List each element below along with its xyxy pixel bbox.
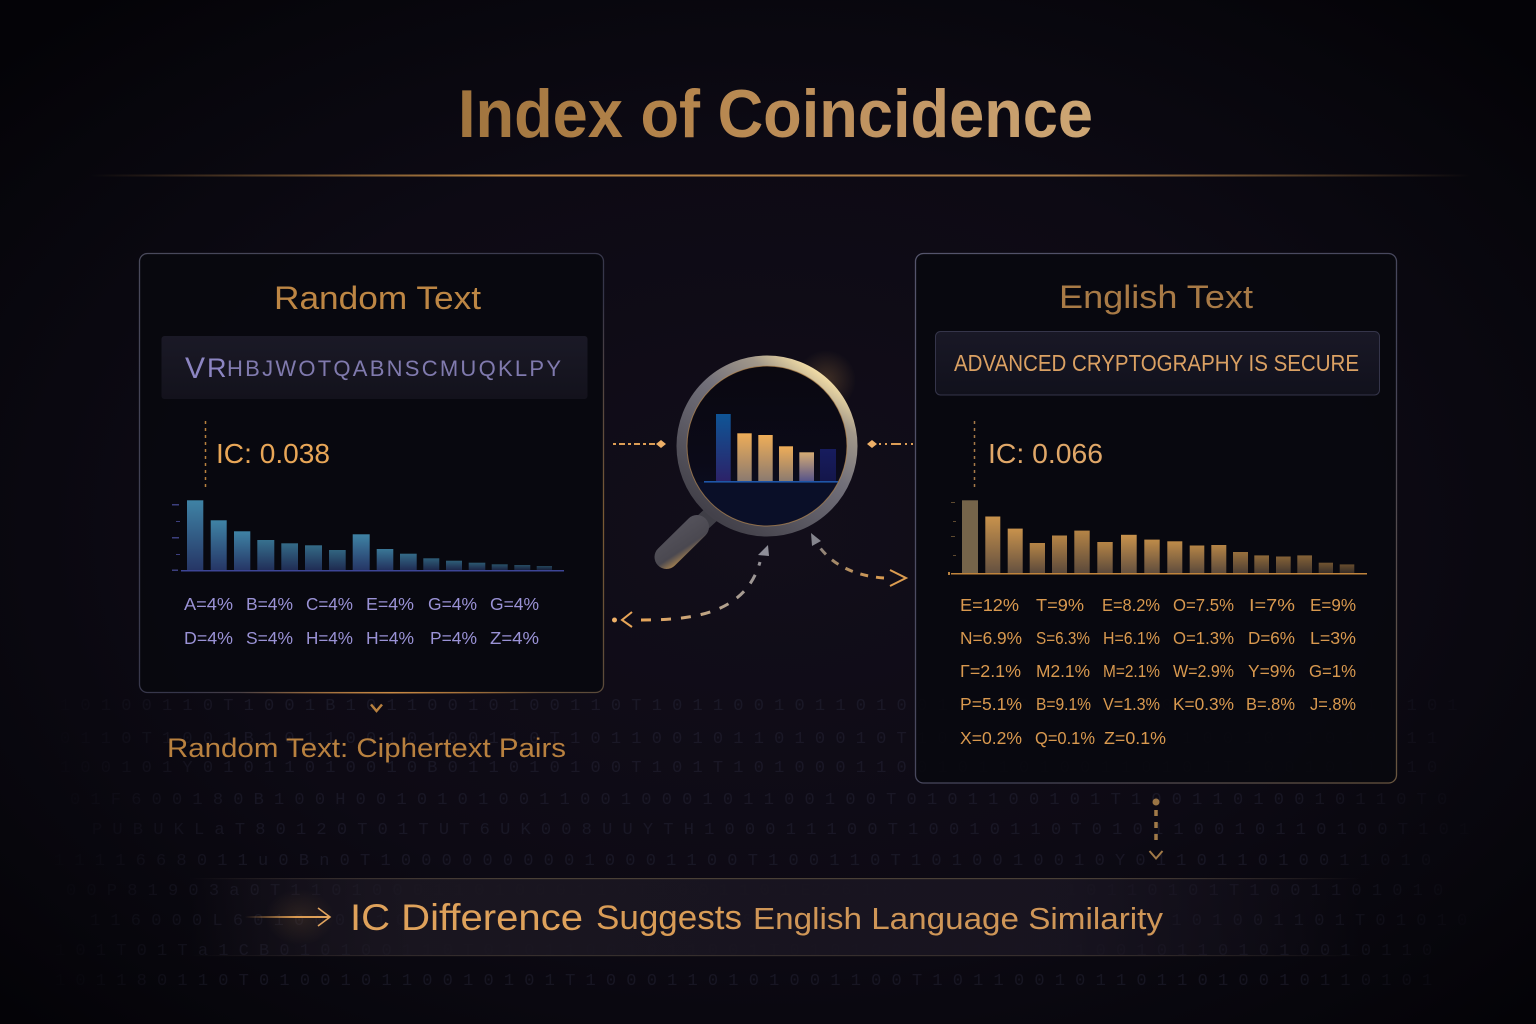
- letter percentages: random: P=4%: [430, 628, 477, 648]
- panel gold bottom edge: [240, 692, 540, 694]
- letter percentages: english: E=12%: [960, 595, 1019, 615]
- caption: random text: Random Text: Ciphertext Pairs: [167, 733, 566, 763]
- conclusion text: [350, 897, 1164, 938]
- plaintext box: [936, 332, 1380, 395]
- letter percentages: english: V=1.3%: [1103, 694, 1160, 714]
- chevron below random panel: [371, 704, 382, 711]
- letter percentages: english: J=.8%: [1310, 694, 1356, 714]
- letter percentages: english: W=2.9%: [1173, 661, 1234, 681]
- panel frame: [916, 254, 1396, 783]
- random ciphertext box: [162, 336, 588, 399]
- letter percentages: english: P=5.1%: [960, 694, 1022, 714]
- letter percentages: english: [960, 595, 1356, 748]
- letter percentages: random: C=4%: [306, 594, 353, 614]
- letter percentages: english: M2.1%: [1036, 661, 1090, 681]
- title: Index of Coincidence: [458, 76, 1093, 152]
- IC value: IC: 0.038: [216, 438, 330, 469]
- background binary pattern: 1 0 0 1 0 1 Y 0 1 0 1 1 0 1 0 0 1 0 B 0 1 1 0 1 0 1 0 0 T 1 0 1 T 1 0 1 0 0 0 1 1 0 0 1 0 1 1 0 1 0 0 1 1 0 1 0 1 T 1 0 0 1 0 1 1 0 1 0: [60, 759, 1437, 778]
- letter percentages: english: K=0.3%: [1173, 694, 1234, 714]
- background binary pattern: 1 1 6 0 0 0 L 6 0 1 0 0 0 1 1 0 1 0 1 0 0 1 0 1 1 0 0 0 1 0 1 1 0 T 0 1 0 1 T 1 0 0 1 0 1 1 0 0 1 0 1 0 1 1 0 1 0 0 1 1 0 1 T 0 1 0 1 0: [90, 912, 1467, 931]
- background binary pattern: 1 0 1 1 8 0 1 1 0 T 0 1 0 0 1 0 1 1 0 0 1 0 1 0 1 T 1 0 0 0 1 1 0 1 0 1 0 0 1 1 0 0 T 1 0 1 1 0 0 1 0 1 1 0 1 1 0 1 0 0 1 0 1 1 0 1 0 1: [55, 972, 1432, 991]
- letter percentages: english: I=7%: [1249, 595, 1295, 615]
- banner arrow: [245, 889, 335, 945]
- letter percentages: random: H=4%: [306, 628, 353, 648]
- letter percentages: english: Z=0.1%: [1104, 728, 1166, 748]
- panel: random text: [140, 254, 604, 694]
- letter percentages: english: B=.8%: [1246, 694, 1295, 714]
- IC value: IC: 0.066: [988, 438, 1103, 469]
- letter percentages: random: A=4%: [184, 594, 233, 614]
- background binary pattern: [54, 697, 1469, 991]
- background binary pattern: 1 0 1 T 0 1 T a 1 C B 0 1 0 1 0 0 1 1 0 T 0 1 0 1 1 0 0 1 0 1 1 0 0 1 T 0 1 0 1 0 0 1 0 0 1 1 0 1 T 1 0 0 1 0 1 1 0 1 0 1 0 0 1 0 1 1 0: [55, 942, 1432, 961]
- letter percentages: random: [184, 594, 539, 648]
- random ciphertext box: R: [207, 353, 226, 383]
- conclusion text: Suggests: [596, 899, 742, 937]
- letter percentages: english: G=1%: [1309, 661, 1356, 681]
- arrow: english panel to magnifier: [867, 440, 913, 448]
- letter percentages: english: O=7.5%: [1173, 595, 1234, 615]
- letter percentages: english: L=3%: [1310, 628, 1356, 648]
- letter percentages: random: S=4%: [246, 628, 293, 648]
- bar chart: random letter frequency: [172, 500, 564, 572]
- arrow: english panel down to conclusion: [1150, 798, 1162, 858]
- letter percentages: english: Y=9%: [1248, 661, 1295, 681]
- background binary pattern: 0 1 1 0 T 1 0 0 1 B 1 0 1 1 0 0 1 0 1 0 0 1 1 0 T 1 0 1 1 0 0 1 0 1 1 0 1 0 0 1 0 T 1 0 1 1 T 0 1 0 0 1 1 0 1 1 0 0 1 0 1 1 0 1 0 0 1 1: [60, 730, 1437, 749]
- plaintext box: ADVANCED CRYPTOGRAPHY IS SECURE: [954, 350, 1359, 376]
- letter percentages: english: O=1.3%: [1173, 628, 1234, 648]
- random ciphertext box: V: [185, 352, 205, 385]
- panel frame: [140, 254, 604, 692]
- title divider: [90, 174, 1470, 176]
- letter percentages: random: Z=4%: [490, 628, 539, 648]
- letter percentages: english: S=6.3%: [1036, 628, 1090, 648]
- letter percentages: english: E=9%: [1310, 595, 1356, 615]
- letter percentages: english: D=6%: [1248, 628, 1295, 648]
- letter percentages: english: N=6.9%: [960, 628, 1022, 648]
- background binary pattern: 0 0 P 8 1 9 0 3 a 0 T 1 1 0 1 0 0 0 1 1 0 1 0 0 0 1 1 0 T 1 0 0 1 1 0 1 E 2 6 1 6 0 Y 1 0 1 1 0 0 1 0 1 1 0 1 0 1 T 1 0 0 1 1 0 1 0 1 0: [66, 882, 1443, 901]
- conclusion banner: [190, 878, 1360, 956]
- random ciphertext box: HBJWOTQABNSCMUQKLPY: [227, 356, 561, 381]
- infographic canvas: [64, 88, 1459, 985]
- letter percentages: english: T=9%: [1036, 595, 1084, 615]
- heading: English Text: English Text: [1059, 279, 1253, 315]
- letter percentages: random: H=4%: [366, 628, 414, 648]
- arrow: curved from magnifier to random side: [612, 545, 769, 627]
- background binary pattern: 0 1 F 6 0 0 1 8 0 B 1 0 0 H 0 0 1 0 1 0 1 0 0 1 1 0 0 1 0 0 0 1 0 1 1 0 0 1 0 0 T 0 1 0 1 1 0 0 1 0 1 T 1 0 0 1 1 0 1 0 0 1 0 1 1 0 T 0: [70, 791, 1447, 810]
- background binary pattern: 1 1 1 1 6 6 8 0 1 1 u 0 B n 0 T 1 0 0 0 0 0 0 0 0 0 1 0 0 0 1 1 0 0 T 1 0 0 1 1 0 T 1 0 1 0 0 1 0 0 1 0 Y 0 1 1 0 1 1 0 1 0 0 1 1 0 1 0: [54, 852, 1431, 871]
- conclusion text: IC Difference: [350, 897, 583, 938]
- letter percentages: random: G=4%: [428, 594, 477, 614]
- arrow: curved from magnifier to english side: [811, 533, 906, 586]
- background binary pattern: 1 0 1 0 0 1 1 0 T 1 0 0 1 B 1 0 1 1 0 0 1 0 1 0 0 1 1 0 T 1 0 1 1 0 0 1 0 1 1 0 1 0 0 1 0 T 1 0 1 1 T 0 1 0 0 1 1 0 1 0 1 1 0 0 1 0 1 0 1: [60, 697, 1458, 716]
- background binary pattern: P U B U K L a T 8 0 1 2 0 T 0 1 T U T 6 U K 0 0 8 U U Y T H 1 0 0 0 1 1 1 0 0 T 1 0 0 1 0 1 1 0 T 0 1 0 1 1 0 0 1 0 1 1 0 1 0 0 T 1 0 1: [92, 821, 1469, 840]
- letter percentages: random: B=4%: [246, 594, 293, 614]
- lens bar chart: [696, 414, 838, 494]
- bar chart: english letter frequency: [948, 500, 1367, 575]
- letter percentages: english: E=8.2%: [1102, 595, 1160, 615]
- letter percentages: english: Q=0.1%: [1035, 728, 1095, 748]
- conclusion text: English Language Similarity: [753, 901, 1164, 936]
- panel: english text: [916, 254, 1396, 783]
- IC value marker: [204, 421, 206, 488]
- arrow: random panel to magnifier: [613, 440, 666, 448]
- letter percentages: english: B=9.1%: [1036, 694, 1091, 714]
- icon: magnifying glass: [666, 350, 856, 557]
- IC value marker: [974, 421, 976, 488]
- letter percentages: random: E=4%: [366, 594, 414, 614]
- letter percentages: english: M=2.1%: [1103, 661, 1160, 681]
- letter percentages: english: H=6.1%: [1103, 628, 1160, 648]
- letter percentages: english: Γ=2.1%: [960, 661, 1021, 681]
- letter percentages: random: D=4%: [184, 628, 233, 648]
- heading: Random Text: Random Text: [274, 280, 481, 316]
- letter percentages: random: G=4%: [490, 594, 539, 614]
- letter percentages: english: X=0.2%: [960, 728, 1022, 748]
